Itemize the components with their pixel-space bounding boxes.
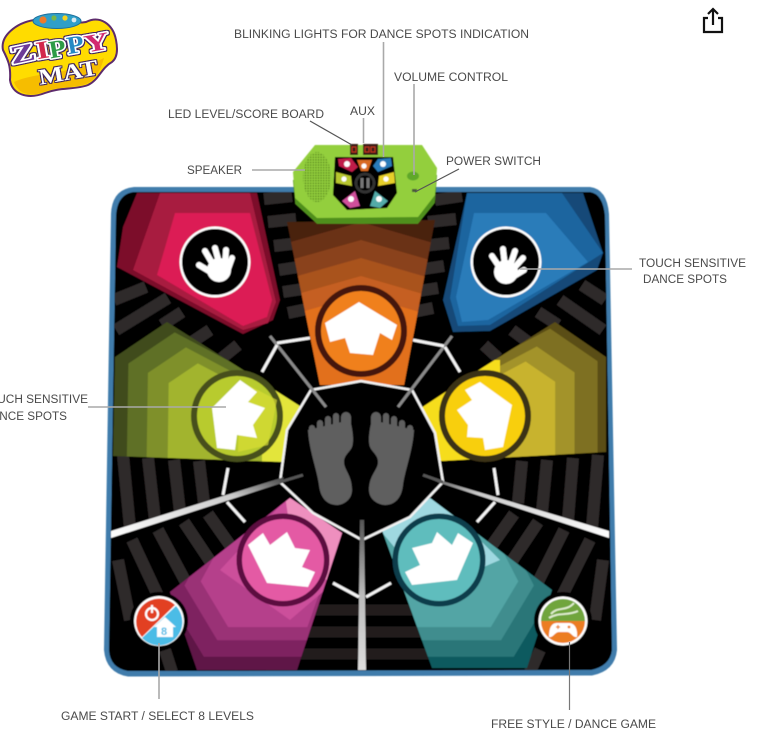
speaker grille: [303, 152, 331, 202]
rays: [111, 336, 609, 670]
logo: Zippy Mat: Y: [82, 28, 111, 59]
pad: pink arrow: [169, 497, 343, 671]
button: game start / select levels: 8: [161, 626, 167, 638]
labels: AUX: [350, 106, 375, 118]
labels: TOUCH SENSITIVE: [639, 258, 746, 270]
control unit: [293, 144, 437, 224]
leader lines: [88, 42, 632, 710]
labels: BLINKING LIGHTS FOR DANCE SPOTS INDICATION: [234, 29, 529, 41]
icon: hand: [199, 248, 232, 282]
logo: Zippy Mat: P: [47, 35, 68, 64]
centre foot zone: [111, 336, 609, 670]
pad: teal arrow: [382, 498, 553, 669]
housing: [293, 145, 437, 218]
button: free style / dance game: [534, 592, 592, 650]
icon: right foot: [369, 416, 414, 505]
dance mat: [104, 187, 617, 676]
logo: Zippy Mat: Z: [8, 39, 38, 70]
pad: orange arrow: [287, 219, 435, 386]
pad: red hand: [117, 193, 280, 334]
labels: LED LEVEL/SCORE BOARD: [168, 109, 324, 121]
labels: VOLUME CONTROL: [394, 72, 509, 84]
labels: SPEAKER: [187, 165, 242, 177]
icon: share: [704, 9, 722, 32]
pad: yellow arrow: [422, 322, 607, 463]
housing shadow edge: [293, 175, 437, 224]
short white segments: [223, 338, 498, 597]
labels: GAME START / SELECT 8 LEVELS: [61, 711, 254, 723]
labels: POWER SWITCH: [446, 156, 541, 168]
icon: hand: [492, 249, 524, 284]
power switch: [412, 189, 417, 192]
background stripes: [114, 196, 605, 672]
icon: left foot: [308, 416, 353, 505]
mat background: [109, 192, 612, 671]
button: game start / select levels: [130, 592, 188, 650]
logo: Zippy Mat: [3, 14, 117, 96]
logo: Zippy Mat: MAT: [36, 55, 100, 90]
logo: Zippy Mat: I: [34, 36, 51, 65]
pad: blue hand: [443, 193, 603, 332]
mini mat panel: [333, 157, 397, 210]
labels: FREE STYLE / DANCE GAME: [491, 719, 656, 731]
volume knob: [407, 172, 419, 180]
logo: Zippy Mat: P: [65, 31, 86, 60]
mat border: [104, 187, 617, 676]
pad: green arrow: [112, 322, 300, 463]
LED displays: [350, 144, 378, 155]
labels: DANCE SPOTS: [643, 274, 727, 286]
